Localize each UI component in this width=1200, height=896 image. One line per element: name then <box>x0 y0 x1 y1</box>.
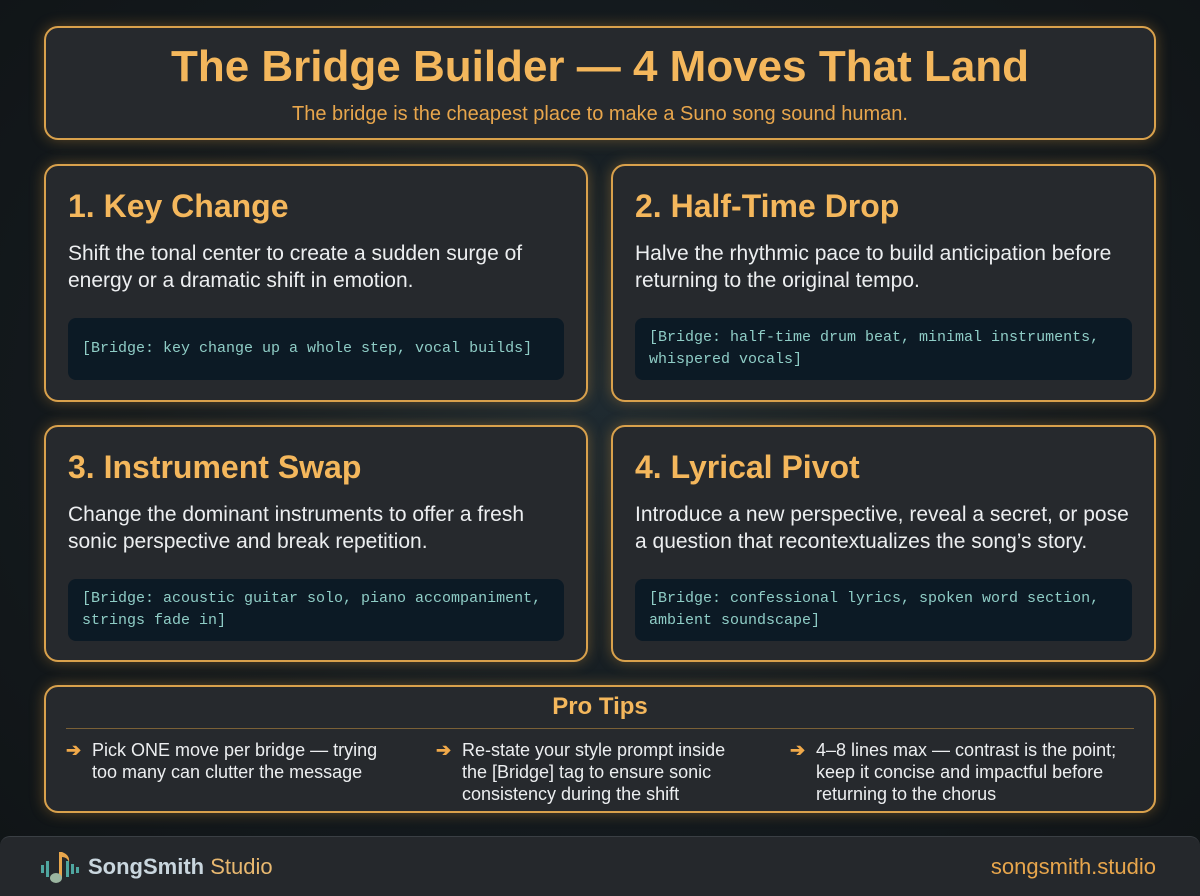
panel: instrument swap <box>44 425 588 662</box>
code prompt: [Bridge: confessional lyrics, spoken word section, ambient soundscape] <box>649 590 1099 629</box>
code prompt: [Bridge: half-time drum beat, minimal instruments, whispered vocals] <box>649 329 1099 368</box>
body text: Change the dominant instruments to offer a fresh sonic perspective and break repetition. <box>68 503 524 553</box>
tip 1: ➔ <box>66 740 81 760</box>
code prompt: [Bridge: acoustic guitar solo, piano accompaniment, strings fade in] <box>82 590 541 629</box>
panel: key change <box>44 164 588 402</box>
code prompt <box>68 318 564 380</box>
heading: 3. Instrument Swap <box>68 449 361 485</box>
code prompt: [Bridge: key change up a whole step, vocal builds] <box>82 340 532 357</box>
panel: pro tips <box>44 685 1156 813</box>
panel: lyrical pivot <box>611 425 1156 662</box>
pro tips heading: Pro Tips <box>552 693 648 720</box>
code prompt <box>635 318 1132 380</box>
tip 2: ➔ <box>436 740 451 760</box>
footer <box>0 836 1200 896</box>
heading: 2. Half-Time Drop <box>635 188 899 224</box>
tip 1: Pick ONE move per bridge — trying too many can clutter the message <box>92 740 377 782</box>
website url: songsmith.studio <box>991 854 1156 879</box>
heading: 4. Lyrical Pivot <box>635 449 860 485</box>
tip 2: Re-state your style prompt inside the [Bridge] tag to ensure sonic consistency during the shift <box>462 740 725 804</box>
code prompt <box>68 579 564 641</box>
body text: Shift the tonal center to create a sudden surge of energy or a dramatic shift in emotion. <box>68 242 522 292</box>
tip 3: ➔ <box>790 740 805 760</box>
heading: 1. Key Change <box>68 188 289 224</box>
logo icon <box>41 852 79 883</box>
code prompt <box>635 579 1132 641</box>
body text: Introduce a new perspective, reveal a secret, or pose a question that recontextualizes the song’s story. <box>635 503 1129 553</box>
tip 3: 4–8 lines max — contrast is the point; keep it concise and impactful before returning to the chorus <box>816 740 1116 804</box>
brand name: SongSmith Studio <box>88 854 273 879</box>
body text: Halve the rhythmic pace to build anticipation before returning to the original tempo. <box>635 242 1111 292</box>
title: The Bridge Builder — 4 Moves That Land <box>171 42 1029 91</box>
header panel <box>44 26 1156 140</box>
panel: half-time drop <box>611 164 1156 402</box>
subtitle: The bridge is the cheapest place to make a Suno song sound human. <box>292 103 908 125</box>
